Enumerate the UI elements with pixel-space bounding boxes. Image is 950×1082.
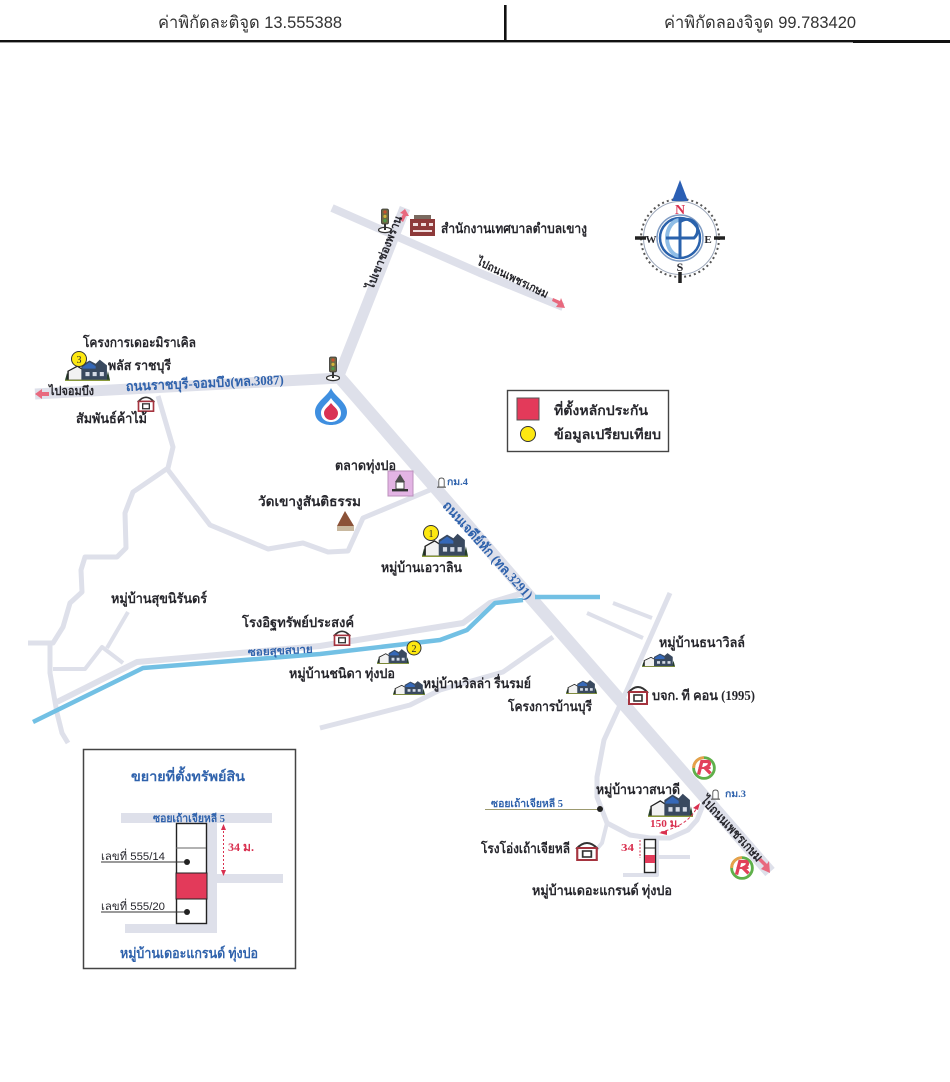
latitude: ค่าพิกัดละติจูด 13.555388 [158, 13, 342, 33]
label: market: ตลาดทุ่งปอ [335, 458, 396, 474]
compass: W [646, 234, 656, 246]
icon: Rx sign south [732, 858, 752, 878]
header: coordinates bar [0, 5, 950, 43]
distance 150 m [650, 803, 700, 835]
icon [576, 843, 598, 860]
label: Suk Nirand village: หมู่บ้านสุขนิรันดร์ [111, 590, 208, 607]
label: โครงการเดอะมิราเคิล [82, 333, 196, 350]
distance 150 m: 150 ม. [650, 818, 680, 830]
legend [508, 390, 668, 452]
icon: brick factory [334, 631, 350, 645]
label: หมู่บ้านชนิดา ทุ่งปอ [289, 666, 395, 682]
label: บจก. ที คอน (1995) [652, 688, 755, 703]
icon: temple [337, 511, 354, 531]
icon: house [377, 649, 409, 664]
road label: Chedi Hak road: ถนนเจดีย์หัก (ทล.3291) [440, 497, 537, 602]
compass [635, 180, 725, 283]
icon: Rx sign north [694, 758, 714, 778]
road label: Soi Suk Sabai: ซอยสุขสบาย [248, 644, 313, 660]
inset plots [176, 824, 207, 924]
icon: house [648, 794, 693, 817]
road label: to Phetkasem south: ไปถนนเพชรเกษม [697, 791, 767, 864]
badge 3: 3 [76, 355, 82, 366]
icon: municipal office [410, 215, 435, 236]
inset panel: property enlargement [84, 750, 296, 968]
Thana Ville [642, 634, 745, 667]
icon: house [566, 680, 597, 694]
compass: E [704, 234, 712, 246]
icon: house [65, 360, 110, 381]
Ban Buri [507, 680, 597, 715]
road label: to Khao Chong Phran: ไปเขาช่องพราน [362, 213, 405, 293]
label: หมู่บ้านวิลล่า รื่นรมย์ [423, 673, 531, 692]
label: temple: วัดเขางูสันติธรรม [258, 494, 361, 510]
badge 1: 1 [428, 529, 434, 540]
label: municipal office: สำนักงานเทศบาลตำบลเขางู [441, 221, 587, 237]
label: timber shop: สัมพันธ์ค้าไม้ [76, 410, 147, 426]
inset title: ขยายที่ตั้งทรัพย์สิน [131, 766, 246, 784]
km marker 3: กม.3 [725, 790, 746, 800]
longitude: ค่าพิกัดลองจิจูด 99.783420 [664, 13, 856, 33]
inset house no. 555/14: เลขที่ 555/14 [101, 848, 165, 863]
compass: N [675, 203, 685, 218]
legend: collateral location [517, 398, 539, 420]
canal [33, 597, 600, 722]
label: โรงโอ่งเถ้าเจียหลี [480, 839, 570, 856]
inset roads [121, 813, 283, 933]
icon: factory [628, 687, 648, 704]
Villa Ruenrom [393, 673, 531, 695]
compass: S [677, 260, 684, 274]
road label: to Chom Bueng: ไปจอมบึง [47, 383, 94, 398]
label: หมู่บ้านวาสนาดี [596, 782, 680, 798]
icon: house [422, 534, 468, 557]
label: โครงการบ้านบุรี [507, 697, 593, 715]
project 1: Evalin [381, 526, 468, 576]
label: The Grand Thung Po: หมู่บ้านเดอะแกรนด์ ทุ่งปอ [532, 882, 672, 899]
inset distance 34 m: 34 ม. [228, 840, 254, 854]
label: brick factory: โรงอิฐทรัพย์ประสงค์ [241, 613, 354, 632]
label: หมู่บ้านเอวาลิน [381, 560, 463, 576]
icon: PT gas station [315, 388, 347, 425]
icon: house [393, 681, 425, 695]
inset distance 34 m [221, 824, 254, 876]
legend label: comparison: ข้อมูลเปรียบเทียบ [554, 427, 661, 443]
icon: timber shop [138, 397, 154, 411]
km marker 4: กม.4 [447, 478, 468, 488]
legend label: collateral: ที่ตั้งหลักประกัน [554, 400, 649, 418]
legend: comparison data [520, 426, 536, 442]
inset house no. 555/20 [101, 898, 190, 915]
icon: traffic light north [378, 209, 392, 233]
property marker on map: 34 [621, 843, 634, 854]
inset village label: หมู่บ้านเดอะแกรนด์ ทุ่งปอ [120, 945, 258, 962]
project 3: The Miracle Plus [65, 333, 196, 381]
km marker 3 [711, 790, 746, 800]
project 2: Chanida [289, 641, 421, 682]
road label: to Phetkasem north: ไปถนนเพชรเกษม [473, 253, 551, 301]
inset house no. 555/20: เลขที่ 555/20 [101, 898, 165, 913]
Soi Tao Jia Li label with leader [485, 797, 603, 812]
inset house no. 555/14 [101, 848, 190, 865]
icon: market [388, 471, 413, 496]
road network [28, 208, 770, 875]
property marker on map [621, 840, 656, 872]
label line 2: พลัส ราชบุรี [108, 358, 172, 374]
Wasanadee village [596, 782, 693, 817]
label: หมู่บ้านธนาวิลล์ [659, 634, 745, 651]
icon: traffic light junction [326, 357, 340, 381]
road label: Ratchaburi-Chom Bueng: ถนนราชบุรี-จอมบึง(ทล.3087) [125, 372, 284, 395]
T-Con company [628, 687, 755, 704]
km marker 4 [437, 478, 468, 488]
inset road label: ซอยเถ้าเจียหลี 5 [153, 812, 225, 825]
badge 2: 2 [412, 644, 416, 655]
direction arrows [35, 209, 770, 873]
Soi Tao Jia Li label with leader: ซอยเถ้าเจียหลี 5 [491, 797, 563, 810]
icon: house [642, 653, 675, 667]
jar factory [480, 839, 598, 860]
